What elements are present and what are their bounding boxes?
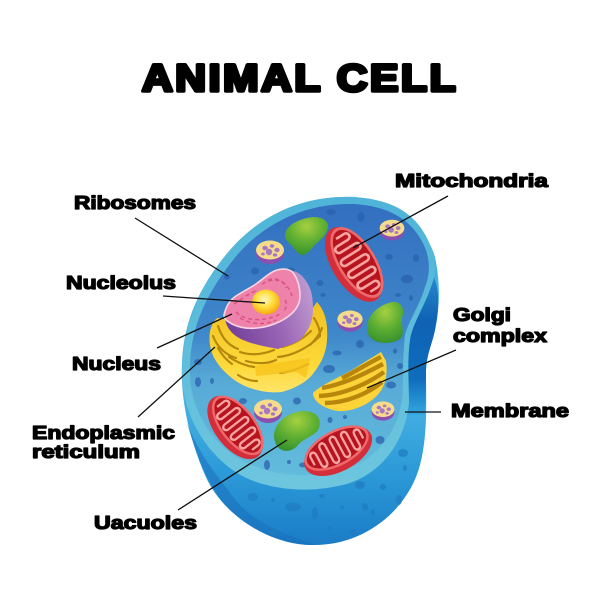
ribosome 5 [372, 401, 394, 421]
mitochondrion bottom right [296, 415, 380, 486]
label: Membrane: Membrane [451, 400, 569, 421]
leader line: nucleus [157, 314, 232, 348]
label: Endoplasmic reticulum: reticulum [32, 441, 140, 462]
cytoplasm spots [194, 209, 419, 470]
ribosome 4 [254, 400, 282, 423]
leader line: mitochondria [353, 196, 448, 248]
ribosome 3 [337, 311, 363, 332]
nucleus [224, 269, 313, 349]
label: Nucleus: Nucleus [72, 353, 161, 374]
er folds [255, 358, 310, 378]
vacuole middle [367, 302, 403, 343]
nucleolus [252, 290, 280, 314]
label: Nucleolus: Nucleolus [66, 272, 176, 293]
animal cell diagram [182, 197, 439, 545]
nucleus pink face [224, 269, 300, 328]
endoplasmic reticulum [209, 302, 327, 392]
label: Endoplasmic reticulum: Endoplasmic [32, 422, 175, 443]
leader line: ribosomes [135, 218, 228, 276]
cell body lower shade [186, 420, 315, 545]
golgi complex [313, 352, 387, 411]
membrane rim [182, 197, 435, 490]
leader line: nucleolus [163, 296, 265, 303]
vacuole top [285, 217, 328, 255]
mitochondrion bottom left [196, 385, 274, 469]
leader line: vacuoles [178, 440, 287, 510]
leader line: endoplasmic reticulum [138, 347, 215, 417]
cytoplasm [190, 204, 429, 475]
membrane and body spots [248, 449, 408, 535]
label: Uacuoles: Uacuoles [94, 512, 197, 533]
mitochondrion top right [313, 217, 395, 311]
title: ANIMAL CELL [142, 56, 456, 99]
nucleus bowl [225, 271, 313, 349]
label: Mitochondria: Mitochondria [395, 170, 549, 191]
ribosome 2 [380, 220, 404, 240]
vacuole bottom [274, 411, 320, 451]
cell body [182, 197, 439, 545]
leader line: golgi complex [367, 350, 456, 388]
label: Ribosomes: Ribosomes [74, 192, 196, 213]
label: Golgi complex: Golgi [453, 304, 511, 325]
label: Golgi complex: complex [453, 325, 548, 346]
ribosome 1 [256, 240, 284, 264]
dark right side of body [405, 270, 438, 415]
leader line: membrane [405, 411, 441, 413]
